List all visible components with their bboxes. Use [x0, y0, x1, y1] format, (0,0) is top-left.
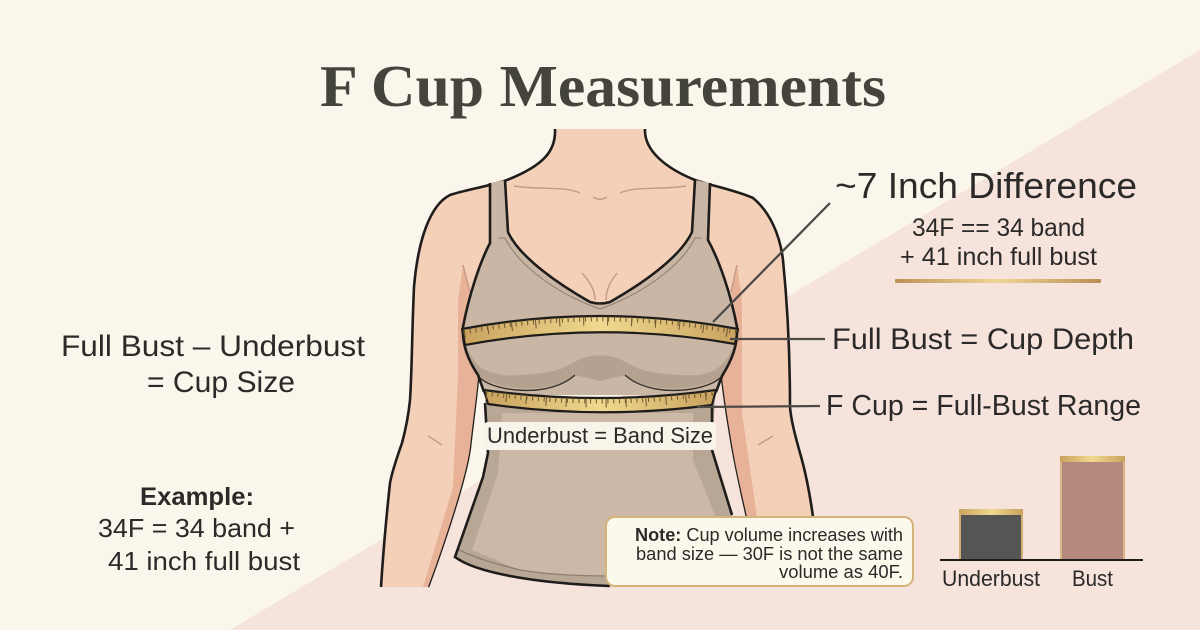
arm shadows — [423, 265, 757, 587]
example text: 34F = 34 band + — [98, 513, 295, 543]
label: underbust band size: Underbust = Band Size — [487, 423, 713, 448]
note box: volume as 40F. — [779, 562, 903, 582]
label: full bust cup depth: Full Bust = Cup Depth — [832, 323, 1134, 356]
example text — [98, 483, 301, 576]
title: F Cup Measurements — [320, 53, 886, 119]
figure: torso with bra and measuring tapes — [381, 129, 813, 587]
bar chart: underbust vs bust: Underbust — [942, 566, 1040, 591]
callout: 7 inch difference: 34F == 34 band — [912, 214, 1085, 242]
bar chart: underbust vs bust: Bust — [1072, 566, 1113, 591]
formula text: = Cup Size — [147, 366, 295, 399]
shapewear lower torso — [455, 400, 745, 586]
bar: bust — [1060, 456, 1125, 560]
callout: 7 inch difference: + 41 inch full bust — [900, 243, 1097, 271]
measuring tape: underbust — [484, 390, 716, 412]
bar chart: underbust vs bust — [940, 456, 1143, 591]
example text: Example: — [140, 483, 254, 511]
measuring tape: full bust — [462, 316, 738, 345]
label: f cup full bust range: F Cup = Full-Bust Range — [826, 390, 1141, 422]
note box — [606, 517, 913, 586]
callout: 7 inch difference — [835, 165, 1137, 283]
formula text — [61, 330, 366, 399]
leader lines — [697, 203, 830, 407]
formula text: Full Bust – Underbust — [61, 330, 366, 363]
note box: band size — 30F is not the same — [636, 544, 903, 564]
callout: 7 inch difference: ~7 Inch Difference — [835, 165, 1137, 206]
skin: neck, shoulders and arms — [381, 129, 813, 587]
note box: Note: Cup volume increases with — [635, 525, 903, 545]
collarbones and skin creases — [428, 186, 773, 445]
bra — [463, 180, 737, 395]
example text: 41 inch full bust — [108, 546, 301, 576]
bar: underbust — [959, 509, 1023, 560]
